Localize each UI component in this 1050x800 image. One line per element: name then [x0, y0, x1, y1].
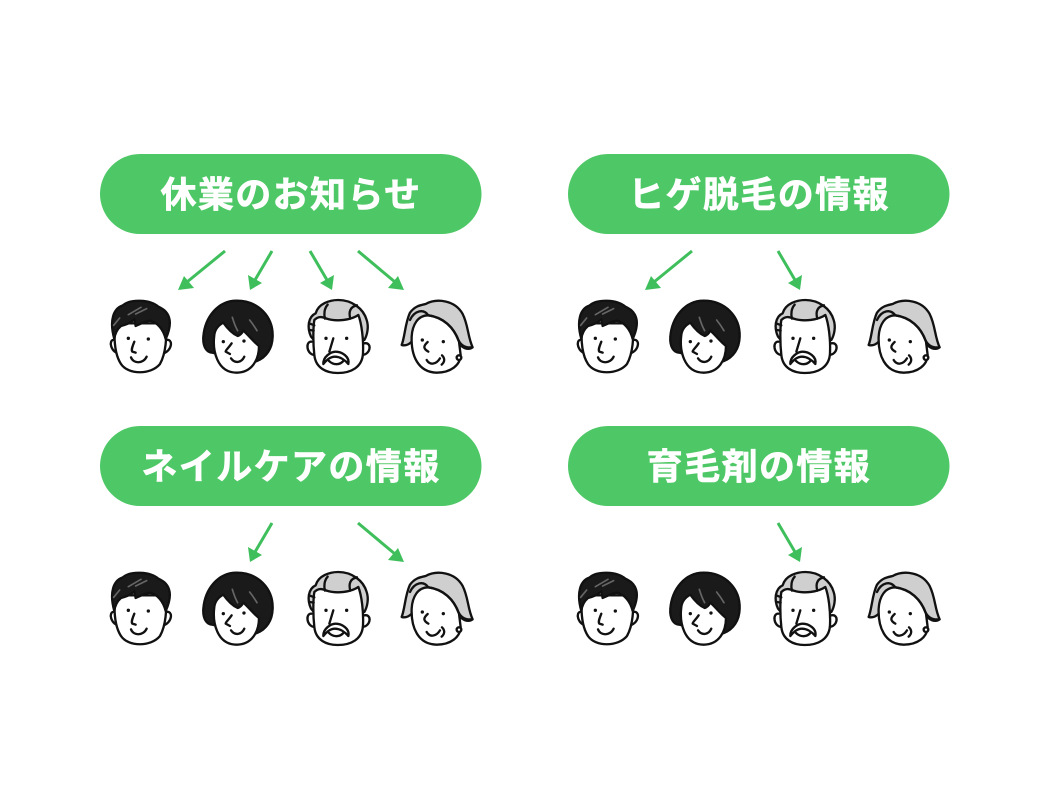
- pill heading: ネイルケアの情報: ネイルケアの情報: [141, 446, 441, 487]
- icon: woman: [670, 573, 740, 645]
- icon: woman: [203, 301, 273, 373]
- arrow to woman: [248, 251, 272, 290]
- arrow to older man: [778, 523, 802, 562]
- group: ネイルケアの情報: [100, 426, 482, 645]
- icon: older man: [774, 572, 837, 645]
- arrow to man: [645, 251, 692, 290]
- pill heading: 休業のお知らせ: [100, 154, 482, 234]
- pill heading: 育毛剤の情報: [568, 426, 950, 506]
- pill heading: 育毛剤の情報: 育毛剤の情報: [647, 446, 871, 487]
- arrow to woman: [248, 523, 272, 562]
- group: 休業のお知らせ: [100, 154, 482, 373]
- pill heading: ネイルケアの情報: [100, 426, 482, 506]
- icon: man: [111, 301, 171, 372]
- icon: older woman: [869, 573, 940, 645]
- arrow to older man: [310, 251, 334, 290]
- icon: older man: [307, 300, 370, 373]
- group: 育毛剤の情報: [568, 426, 950, 645]
- arrow to older woman: [358, 523, 404, 562]
- icon: man: [578, 301, 638, 372]
- group: ヒゲ脱毛の情報: [568, 154, 950, 373]
- arrow to man: [178, 251, 225, 290]
- icon: older woman: [869, 301, 940, 373]
- arrow to older woman: [358, 251, 404, 290]
- icon: woman: [203, 573, 273, 645]
- icon: older man: [774, 300, 837, 373]
- icon: older woman: [402, 301, 473, 373]
- icon: man: [111, 573, 171, 644]
- pill heading: ヒゲ脱毛の情報: ヒゲ脱毛の情報: [628, 174, 890, 215]
- pill heading: ヒゲ脱毛の情報: [568, 154, 950, 234]
- pill heading: 休業のお知らせ: 休業のお知らせ: [160, 174, 422, 215]
- icon: older woman: [402, 573, 473, 645]
- icon: older man: [307, 572, 370, 645]
- arrow to older man: [778, 251, 802, 290]
- icon: woman: [670, 301, 740, 373]
- icon: man: [578, 573, 638, 644]
